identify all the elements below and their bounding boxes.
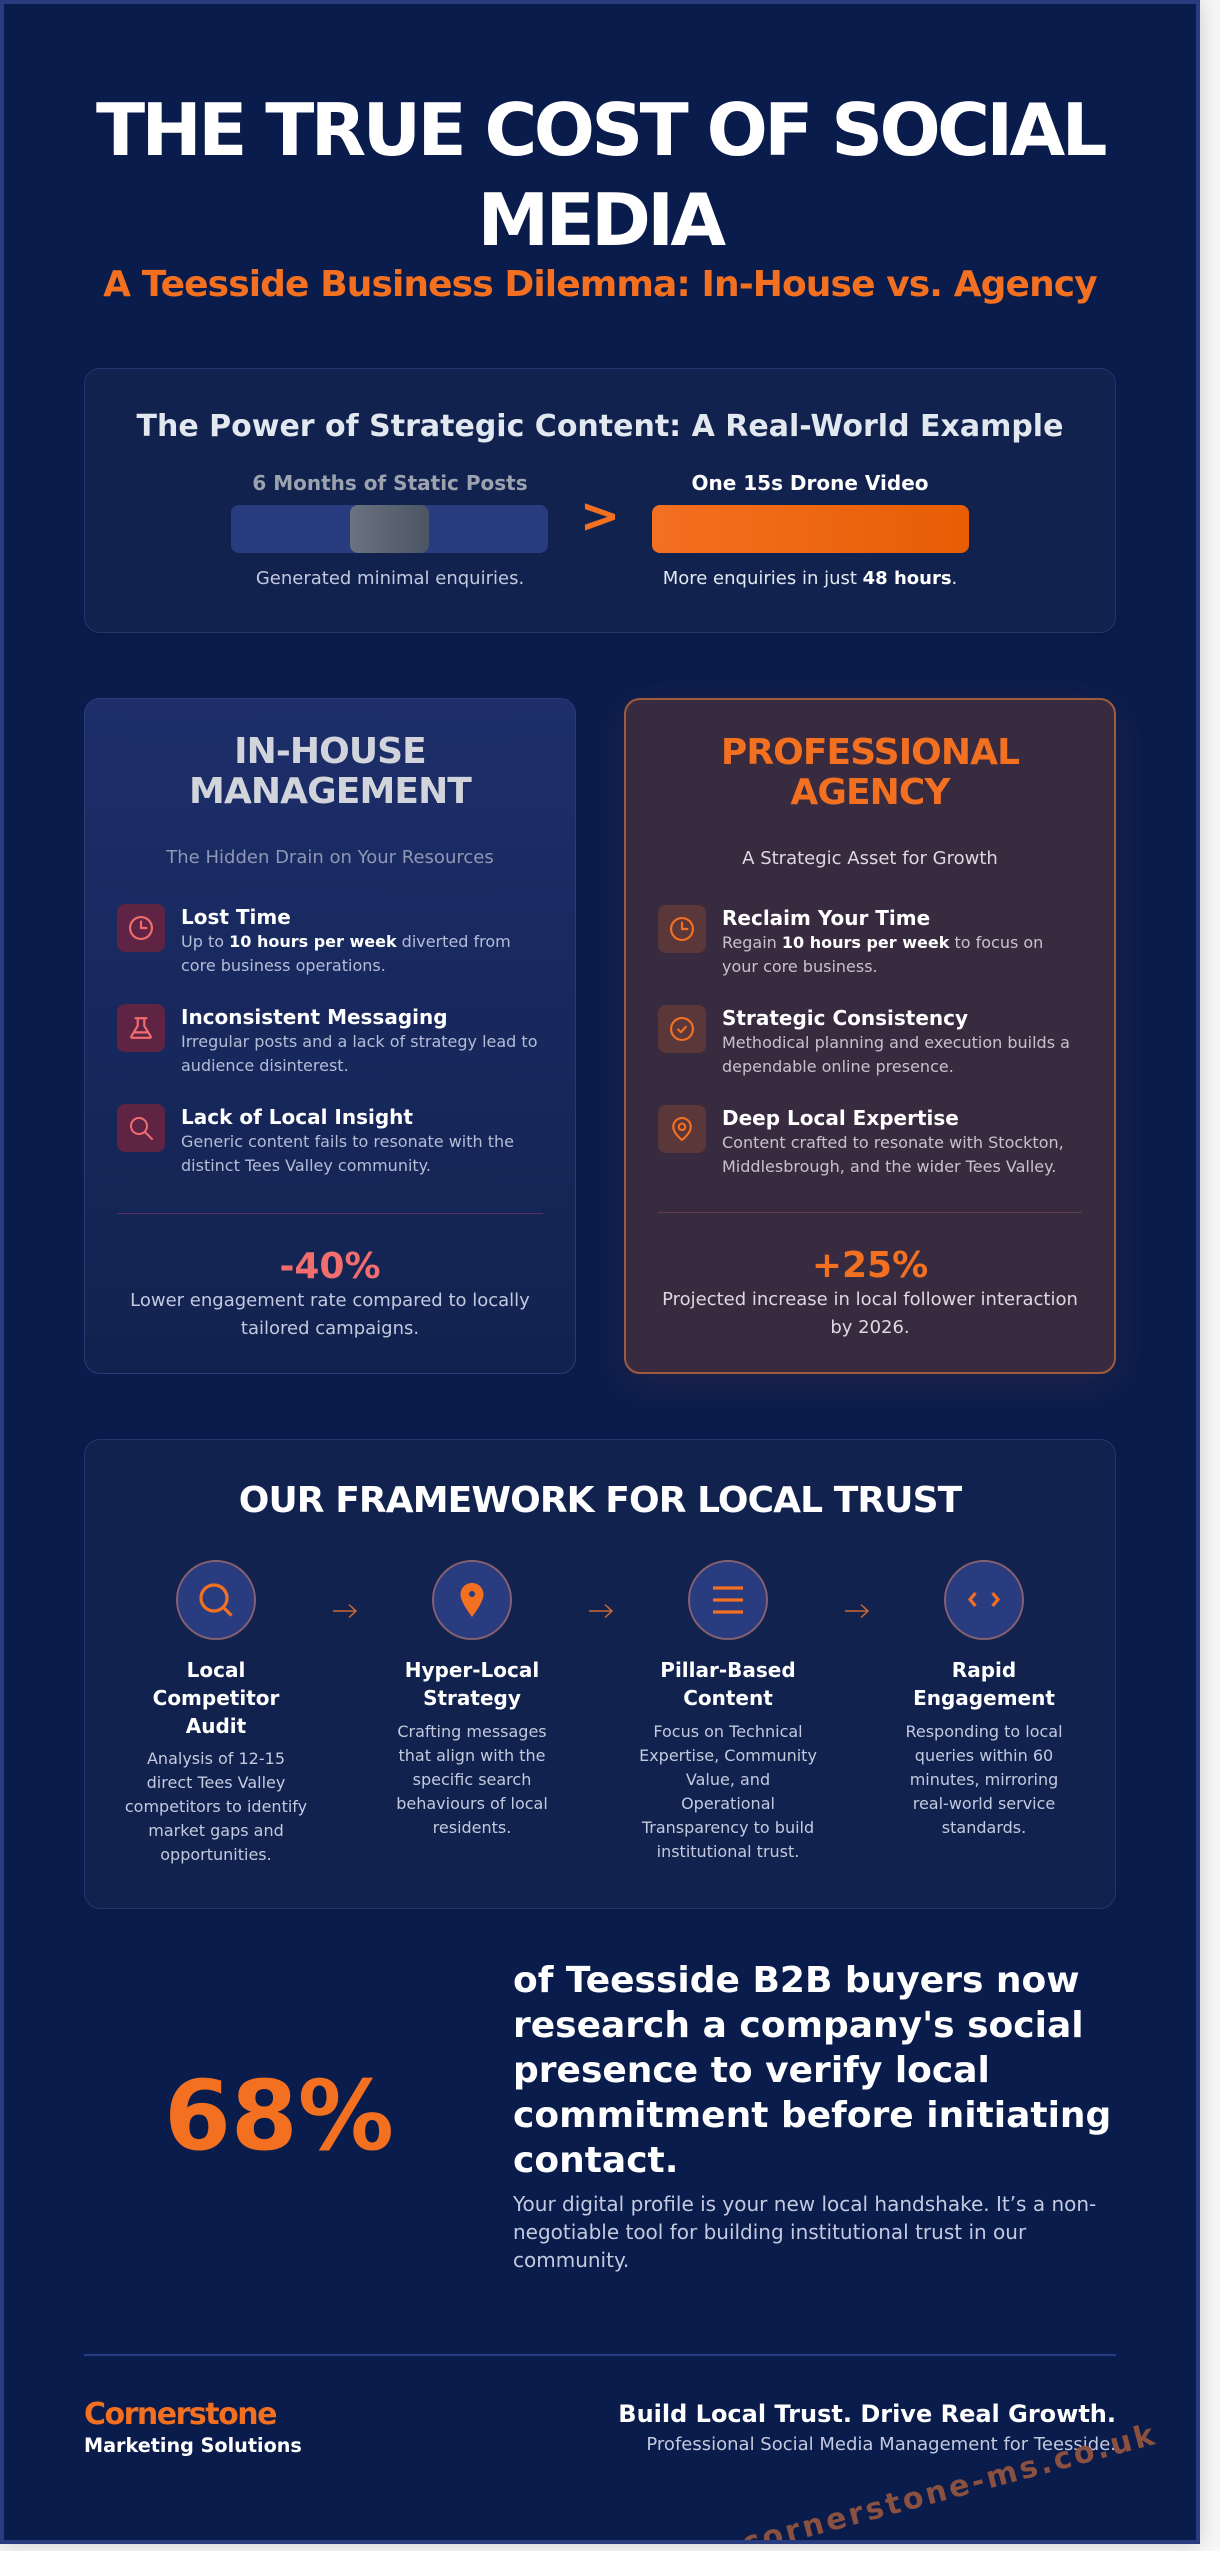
step 1 description: competitors to identify — [125, 1797, 307, 1816]
step 1 title: Audit — [186, 1714, 246, 1738]
panel: framework — [84, 1439, 1116, 1909]
stat caption — [130, 1290, 530, 1339]
step 4 description: queries within 60 — [915, 1746, 1053, 1765]
step 1 title — [153, 1658, 280, 1738]
stat statement — [513, 1960, 1111, 2181]
drone video bar — [652, 505, 969, 553]
step 4 description: real-world service — [913, 1794, 1055, 1813]
step 1 title: Competitor — [153, 1686, 279, 1710]
drone video caption: More enquiries in just 48 hours. — [663, 568, 957, 589]
subtitle: A Teesside Business Dilemma: In-House vs. Agency — [103, 264, 1097, 305]
stat: -40%: -40% — [279, 1246, 381, 1287]
step 4 description — [905, 1722, 1063, 1837]
icon: check circle (orange) — [658, 1005, 706, 1053]
drone video label: One 15s Drone Video — [691, 471, 929, 495]
example heading: The Power of Strategic Content: A Real-World Example — [137, 409, 1063, 444]
footer tagline: Build Local Trust. Drive Real Growth. — [618, 2400, 1116, 2428]
infographic frame: Methodical planning and execution builds a — [722, 1033, 1070, 1052]
arrow 3 — [845, 1604, 869, 1618]
step 2 title — [405, 1658, 539, 1710]
icon: map pin (orange) — [658, 1105, 706, 1153]
in-house heading — [189, 731, 472, 812]
panel: real-world example — [84, 368, 1116, 633]
static posts caption: Generated minimal enquiries. — [256, 568, 524, 589]
static posts bar fill — [350, 505, 429, 553]
infographic frame: Middlesbrough, and the wider Tees Valley. — [722, 1157, 1056, 1176]
stat statement: presence to verify local — [513, 2050, 990, 2091]
item: lost time — [181, 905, 511, 975]
infographic frame: Inconsistent Messaging — [181, 1005, 448, 1029]
step 4 title — [913, 1658, 1055, 1710]
stat caption: Lower engagement rate compared to locally — [130, 1290, 530, 1311]
step 2 description: behaviours of local — [396, 1794, 548, 1813]
step 4 description: standards. — [942, 1818, 1026, 1837]
in-house heading: MANAGEMENT — [189, 771, 471, 812]
step 1 description: opportunities. — [160, 1845, 272, 1864]
infographic frame: Lost Time — [181, 905, 291, 929]
step 1 description: market gaps and — [148, 1821, 284, 1840]
stat supporting text: negotiable tool for building institutional trust in our — [513, 2220, 1026, 2244]
step 3 title — [660, 1658, 796, 1710]
step 4: circle icon code — [944, 1560, 1024, 1640]
title — [96, 88, 1106, 262]
item: lack of local insight — [181, 1105, 514, 1175]
step 3 title: Content — [683, 1686, 773, 1710]
step 3: circle icon lines — [688, 1560, 768, 1640]
step 3 description: Focus on Technical — [653, 1722, 803, 1741]
stat caption: Projected increase in local follower interaction — [662, 1289, 1078, 1310]
title: THE TRUE COST OF SOCIAL — [96, 88, 1104, 172]
step 2 description: Crafting messages — [397, 1722, 547, 1741]
footer sub-tagline: Professional Social Media Management for Teesside. — [646, 2434, 1116, 2455]
infographic frame: Generic content fails to resonate with the — [181, 1132, 514, 1151]
step 3 title: Pillar-Based — [660, 1658, 796, 1682]
stat statement: of Teesside B2B buyers now — [513, 1960, 1080, 2001]
step 1: circle icon search — [176, 1560, 256, 1640]
brand name: Cornerstone — [84, 2397, 276, 2432]
arrow 1 — [333, 1604, 357, 1618]
step 3 description: Value, and — [686, 1770, 770, 1789]
infographic frame: Regain 10 hours per week to focus on — [722, 933, 1043, 952]
step 1 description: direct Tees Valley — [147, 1773, 285, 1792]
infographic frame: Irregular posts and a lack of strategy lead to — [181, 1032, 537, 1051]
stat statement: contact. — [513, 2140, 678, 2181]
step 4 description: minutes, mirroring — [910, 1770, 1058, 1789]
step 1 description: Analysis of 12-15 — [147, 1749, 285, 1768]
in-house subtitle: The Hidden Drain on Your Resources — [166, 847, 494, 868]
stat caption — [662, 1289, 1078, 1338]
stat statement: research a company's social — [513, 2005, 1084, 2046]
static posts label: 6 Months of Static Posts — [252, 471, 528, 495]
step 2 description — [396, 1722, 548, 1837]
step 3 description — [639, 1722, 817, 1861]
stat statement: commitment before initiating — [513, 2095, 1111, 2136]
agency subtitle: A Strategic Asset for Growth — [742, 848, 998, 869]
step 2 description: specific search — [413, 1770, 531, 1789]
item: inconsistent messaging — [181, 1005, 537, 1075]
step 4 title: Rapid — [952, 1658, 1016, 1682]
big stat: 68%: 68% — [164, 2060, 394, 2172]
agency heading — [721, 732, 1020, 813]
panel: professional agency — [624, 698, 1116, 1374]
step 4 title: Engagement — [913, 1686, 1055, 1710]
agency heading: PROFESSIONAL — [721, 732, 1019, 773]
agency heading: AGENCY — [790, 772, 950, 813]
infographic frame: Content crafted to resonate with Stockton, — [722, 1133, 1064, 1152]
stat supporting text: Your digital profile is your new local handshake. It’s a non- — [513, 2192, 1096, 2216]
step 3 description: Transparency to build — [642, 1818, 814, 1837]
greater-than symbol: > — [580, 488, 620, 544]
step 2 description: residents. — [433, 1818, 511, 1837]
static posts bar — [231, 505, 548, 553]
item: deep local expertise — [722, 1106, 1064, 1176]
title: MEDIA — [477, 178, 723, 262]
step 3 description: Operational — [681, 1794, 775, 1813]
arrow 2 — [589, 1604, 613, 1618]
stat: +25%: +25% — [812, 1245, 928, 1286]
step 2 description: that align with the — [399, 1746, 545, 1765]
infographic frame: Reclaim Your Time — [722, 906, 930, 930]
step 4 description: Responding to local — [905, 1722, 1063, 1741]
stat caption: by 2026. — [830, 1317, 910, 1338]
in-house heading: IN-HOUSE — [234, 731, 426, 772]
step 2: circle icon pin — [432, 1560, 512, 1640]
step 2 title: Strategy — [423, 1686, 521, 1710]
stat supporting text — [513, 2192, 1096, 2272]
stat caption: tailored campaigns. — [241, 1318, 419, 1339]
item: reclaim your time — [722, 906, 1043, 976]
infographic frame: dependable online presence. — [722, 1057, 954, 1076]
icon: search (red) — [117, 1104, 165, 1152]
step 3 description: institutional trust. — [657, 1842, 799, 1861]
infographic frame: audience disinterest. — [181, 1056, 349, 1075]
infographic frame: Deep Local Expertise — [722, 1106, 959, 1130]
stat supporting text: community. — [513, 2248, 629, 2272]
infographic frame: core business operations. — [181, 956, 386, 975]
step 1 title: Local — [187, 1658, 245, 1682]
infographic frame: Lack of Local Insight — [181, 1105, 413, 1129]
framework heading: OUR FRAMEWORK FOR LOCAL TRUST — [239, 1480, 961, 1521]
step 2 title: Hyper-Local — [405, 1658, 539, 1682]
item: strategic consistency — [722, 1006, 1070, 1076]
icon: clock (red) — [117, 904, 165, 952]
infographic frame: your core business. — [722, 957, 878, 976]
step 3 description: Expertise, Community — [639, 1746, 817, 1765]
infographic frame: distinct Tees Valley community. — [181, 1156, 431, 1175]
step 1 description — [125, 1749, 307, 1864]
icon: clock (orange) — [658, 905, 706, 953]
infographic frame: Strategic Consistency — [722, 1006, 968, 1030]
brand descriptor: Marketing Solutions — [84, 2434, 302, 2457]
infographic frame: Up to 10 hours per week diverted from — [181, 932, 511, 951]
panel: in-house management — [84, 698, 576, 1374]
icon: flask (red) — [117, 1004, 165, 1052]
